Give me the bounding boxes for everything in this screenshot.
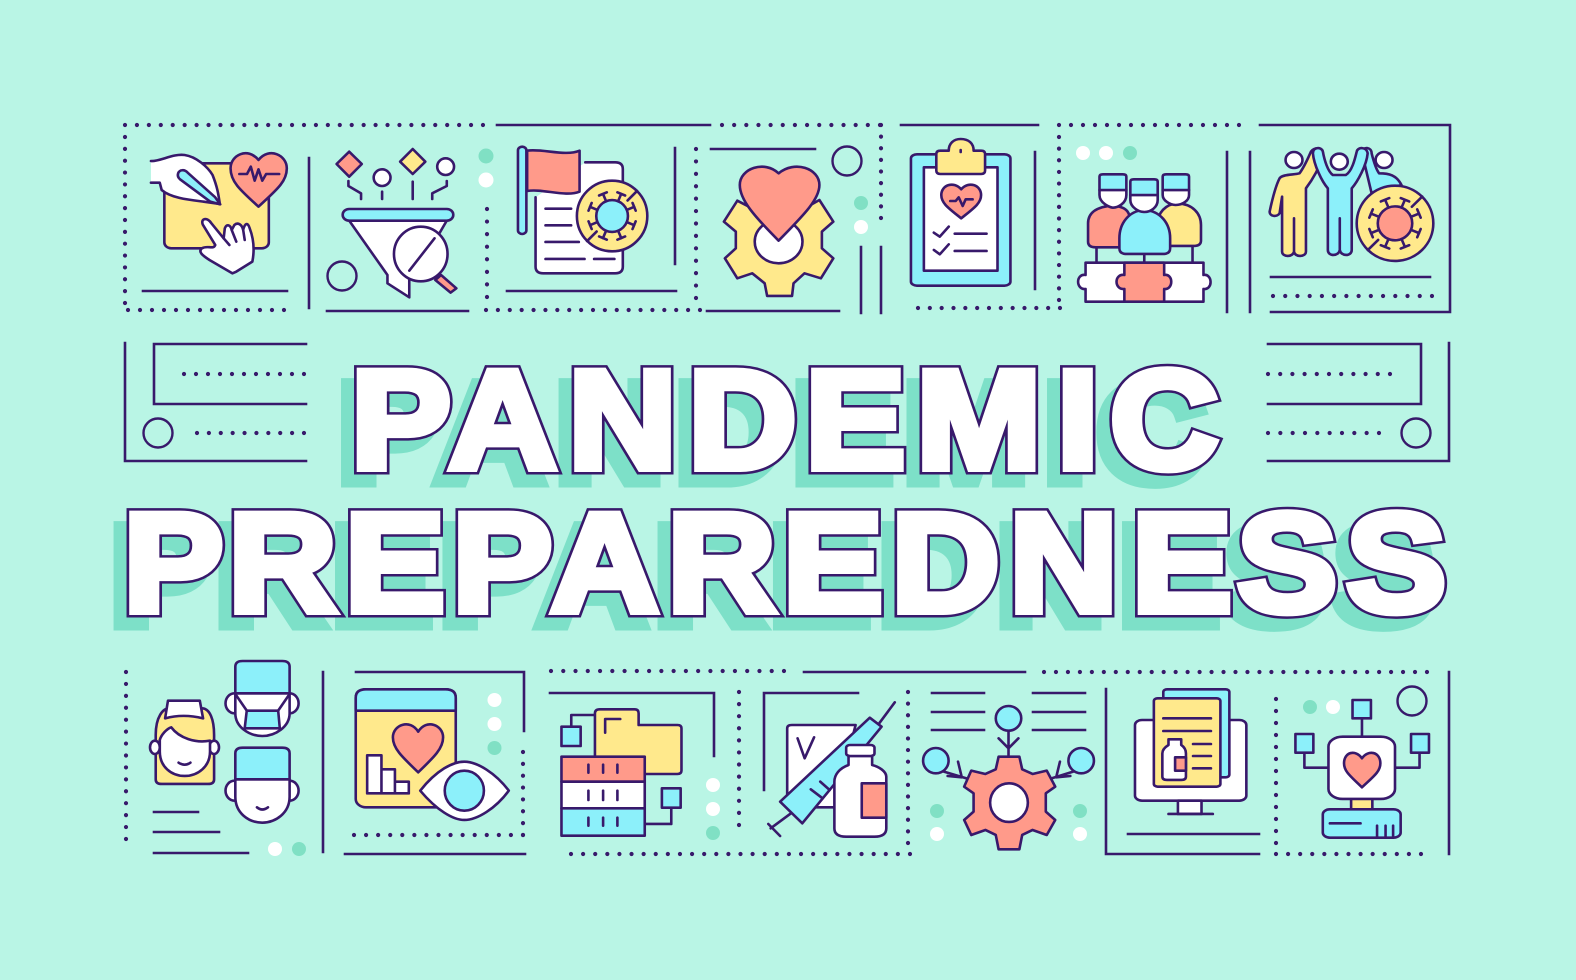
- icon: heart with pulse: [231, 153, 287, 207]
- icon: clipboard with heart and checklist: [911, 139, 1010, 286]
- title shadow: [110, 355, 1433, 654]
- icon: funnel with magnifier: [337, 149, 456, 297]
- title outline: PANDEMIC: [351, 342, 1218, 498]
- title shadow: PANDEMIC: [338, 355, 1205, 511]
- title fill: PANDEMIC: [351, 342, 1218, 498]
- icon: nurse and doctors: [150, 661, 299, 823]
- icon: health dashboard with eye: [356, 689, 509, 820]
- icon: crossed virus: [1357, 186, 1433, 261]
- icon: heart device with linked nodes: [1295, 700, 1429, 838]
- icon: people high five beside crossed virus: [1270, 148, 1433, 261]
- title fill: [123, 342, 1446, 641]
- title outline: [123, 342, 1446, 641]
- icon: crossed virus: [577, 181, 647, 251]
- title: Pandemic Preparedness: [110, 342, 1446, 654]
- icon: vaccine syringe and vial: [768, 702, 895, 837]
- icon: monitor with document and vial: [1135, 689, 1246, 814]
- icon: medical team and puzzle: [1078, 174, 1211, 302]
- icon: heart on gear: [724, 167, 833, 296]
- icon: hands on chart with heart: [151, 153, 287, 273]
- icon: doctor wearing mask: [226, 661, 299, 736]
- icon: gear with connected nodes: [923, 706, 1094, 849]
- icon: folder and server stack: [561, 709, 681, 836]
- title shadow: PREPAREDNESS: [110, 498, 1433, 654]
- title fill: PREPAREDNESS: [123, 485, 1446, 641]
- icon: flag, document and crossed virus: [518, 147, 647, 273]
- title outline: PREPAREDNESS: [123, 485, 1446, 641]
- icon: doctor: [226, 748, 299, 823]
